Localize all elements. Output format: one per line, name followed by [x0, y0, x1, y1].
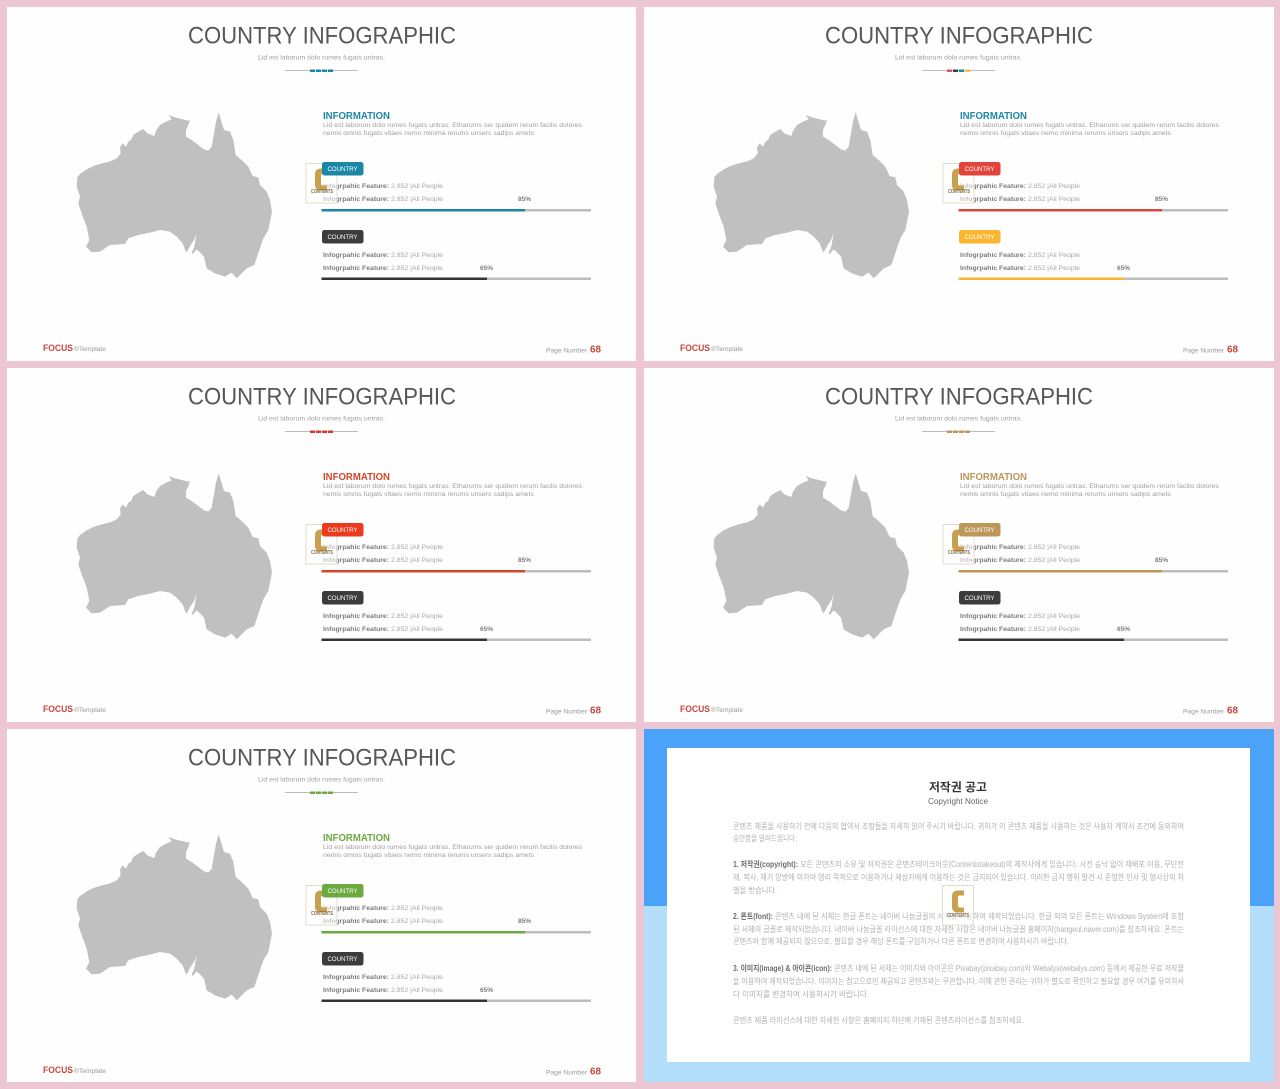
page number: 68 [590, 704, 601, 716]
country block 1: 2.852 |All People [391, 557, 443, 564]
notice section 3: image and icon: 3. 이미지(image) & 아이콘(icon): [733, 963, 832, 973]
heading: information: INFORMATION [323, 833, 390, 844]
badge: COUNTRY [964, 166, 995, 173]
country block 2: COUNTRY [328, 595, 358, 602]
country block 2: 2.852 |All People [391, 265, 443, 272]
footer brand: FOCUS [43, 1065, 73, 1076]
country block 2 [322, 230, 591, 280]
badge [959, 162, 1000, 176]
title divider [922, 430, 995, 433]
country block 1: Infogrpahic Feature: [960, 557, 1026, 564]
watermark logo [943, 524, 974, 564]
notice subtitle: Copyright Notice [928, 797, 989, 806]
country block 2: Infogrpahic Feature: [960, 265, 1026, 272]
country block 1: Infogrpahic Feature: [323, 183, 389, 190]
badge: COUNTRY [328, 166, 358, 173]
title divider [285, 430, 358, 433]
country block 2: Infogrpahic Feature: [323, 265, 389, 272]
watermark logo [943, 164, 974, 203]
watermark logo: CONTENTS [947, 913, 970, 919]
panel: copyright notice [644, 729, 1274, 1082]
page number [546, 704, 601, 716]
page number: 68 [1227, 704, 1238, 716]
country block 1: 2.852 |All People [1028, 557, 1080, 564]
page number: Page Number [546, 348, 588, 354]
country block 2 [322, 591, 591, 641]
page number: 68 [1227, 344, 1238, 356]
information text: Lid est laborum dolo rumes fugats untras. Etharums ser quidem rerum facilis dolores [323, 844, 583, 851]
notice section 2: font: 2. 폰트(font): [733, 912, 773, 921]
panel: slide 1 teal [7, 7, 636, 361]
watermark logo: CONTENTS [948, 189, 971, 195]
information text: Lid est laborum dolo rumes fugats untras. Etharums ser quidem rerum facilis dolores [323, 122, 583, 129]
notice section 1: copyright: 벌을 받습니다. [733, 885, 777, 895]
watermark logo [942, 886, 974, 925]
page number: 68 [590, 344, 601, 356]
page number: Page Number [1183, 708, 1225, 716]
notice section 3: image and icon [733, 963, 1184, 999]
footer brand: FOCUS [43, 343, 73, 354]
country block 1: 2.852 |All People [391, 544, 443, 551]
country block 1: Infogrpahic Feature: [323, 557, 389, 564]
notice section 1: copyright: 1. 저작권(copyright): [733, 859, 798, 869]
notice section 1: copyright: 모든 콘텐츠의 소유 및 저작권은 콘텐츠테이크아웃(Contentstakeout)의 제작사에게 있습니다. 사전 승낙 없이 재배포 이용, 무단전 [800, 859, 1184, 869]
country block 1: Infogrpahic Feature: [960, 544, 1026, 551]
information text [323, 122, 583, 137]
title: COUNTRY INFOGRAPHIC [825, 22, 1093, 50]
country block 2: 2.852 |All People [391, 974, 443, 981]
country block 2: Infogrpahic Feature: [960, 626, 1026, 633]
notice closing line: 콘텐츠 제품 라이선스에 대한 자세한 사항은 홈페이지 하단에 기재된 콘텐츠라이선스를 참조하세요. [733, 1015, 1024, 1025]
country block 2: Infogrpahic Feature: [323, 987, 389, 994]
country block 2: Infogrpahic Feature: [960, 252, 1026, 259]
page number [546, 344, 601, 356]
country block 1: Infogrpahic Feature: [323, 544, 389, 551]
information text: Lid est laborum dolo rumes fugats untras. Etharums ser quidem rerum facilis dolores [323, 483, 583, 490]
subtitle: Lid est laborum dolo rumes fugats untras. [258, 54, 385, 62]
heading: information: INFORMATION [960, 472, 1027, 483]
country block 2: 2.852 |All People [1028, 252, 1080, 259]
notice section 1: copyright [733, 859, 1184, 895]
notice section 2: font: 콘텐츠와 함께 제공되지 않으므로, 필요할 경우 해당 폰트를 구입하거나 다른 폰트로 변경하여 사용하시기 바랍니다. [733, 936, 1069, 946]
country block 1: 85% [518, 919, 532, 925]
country block 2: 65% [1117, 266, 1131, 272]
panel: slide 2 red and yellow [644, 7, 1274, 361]
title divider [285, 70, 358, 72]
country block 2: Infogrpahic Feature: [323, 252, 389, 259]
country block 1 [943, 162, 1228, 212]
notice section 2: font: 콘텐츠 내에 된 서체는 한글 폰트는 네이버 나눔글꼴의 서체를 이용하여 제작되었습니다. 한글 외의 모든 폰트는 Windows System에 포함 [775, 911, 1185, 921]
country block 1: 2.852 |All People [391, 905, 443, 912]
information text [960, 122, 1220, 137]
title divider [285, 792, 358, 794]
watermark logo: CONTENTS [948, 550, 971, 556]
country block 2: COUNTRY [328, 234, 358, 241]
panel: slide 4 tan [644, 368, 1274, 722]
country block 2 [322, 952, 591, 1002]
title: COUNTRY INFOGRAPHIC [188, 744, 456, 772]
country block 1 [943, 523, 1228, 572]
page number: Page Number [546, 1070, 588, 1076]
subtitle: Lid est laborum dolo rumes fugats untras. [895, 54, 1022, 62]
footer brand: ®Template [711, 706, 743, 714]
badge [322, 162, 364, 176]
title: COUNTRY INFOGRAPHIC [825, 384, 1093, 410]
badge: COUNTRY [328, 527, 358, 534]
information text: nemis omnis fugats vitaes nemo minima rerums unsers sadips amets [323, 852, 535, 859]
country block 1: 85% [1155, 558, 1169, 564]
country block 1: Infogrpahic Feature: [960, 196, 1026, 203]
country block 2: COUNTRY [964, 234, 995, 241]
page number [1183, 344, 1238, 356]
subtitle: Lid est laborum dolo rumes fugats untras. [895, 416, 1022, 422]
country block 2: 2.852 |All People [391, 987, 443, 994]
map: Australia [76, 834, 272, 1000]
country block 1: 2.852 |All People [1028, 196, 1080, 203]
country block 2: 2.852 |All People [391, 613, 443, 620]
country block 1 [306, 162, 591, 212]
notice intro [733, 821, 1184, 843]
notice intro: 승인함을 알려드립니다. [733, 833, 797, 843]
country block 1: 2.852 |All People [391, 918, 443, 925]
country block 1: Infogrpahic Feature: [323, 196, 389, 203]
notice title: 저작권 공고 [929, 780, 987, 794]
country block 1: Infogrpahic Feature: [323, 905, 389, 912]
country block 1: Infogrpahic Feature: [323, 918, 389, 925]
watermark logo [306, 164, 337, 203]
country block 2: 2.852 |All People [1028, 626, 1080, 633]
information text: Lid est laborum dolo rumes fugats untras. Etharums ser quidem rerum facilis dolores [960, 122, 1220, 129]
notice section 1: copyright: 재, 복사, 재기 양방에 의하여 영리 목적으로 이용하거나 제삼자에게 이용하는 것은 금지되어 있습니다. 이러한 금지 행위 발견 시 준엄한 민사 및 형사상의 처 [733, 872, 1184, 882]
country block 2: 65% [1117, 627, 1131, 633]
page number: Page Number [546, 708, 588, 716]
map: Australia [76, 112, 272, 278]
footer brand [680, 704, 743, 715]
heading: information: INFORMATION [323, 472, 390, 483]
country block 1: 85% [518, 197, 532, 203]
information text: nemis omnis fugats vitaes nemo minima rerums unsers sadips amets [323, 491, 535, 498]
country block 1: 2.852 |All People [391, 183, 443, 190]
country block 2: Infogrpahic Feature: [323, 974, 389, 981]
country block 1 [306, 523, 591, 572]
footer brand: FOCUS [43, 704, 73, 715]
page number [1183, 704, 1238, 716]
country block 2: COUNTRY [964, 595, 995, 602]
subtitle: Lid est laborum dolo rumes fugats untras. [258, 776, 385, 784]
country block 2: Infogrpahic Feature: [960, 613, 1026, 620]
country block 1: 85% [518, 558, 532, 564]
badge: COUNTRY [328, 888, 358, 895]
country block 2: 65% [480, 266, 494, 272]
notice section 3: image and icon: 콘텐츠 내에 된 서체는 이미지와 아이콘은 Pixabay(pixabay.com)와 Webalys(webalys.com) 등에서 제공한 무료 저작물 [834, 963, 1184, 973]
country block 1: 2.852 |All People [1028, 183, 1080, 190]
country block 1: 2.852 |All People [1028, 544, 1080, 551]
footer brand: FOCUS [680, 704, 710, 715]
country block 2: COUNTRY [328, 956, 358, 963]
information text: nemis omnis fugats vitaes nemo minima rerums unsers sadips amets [960, 130, 1172, 137]
country block 2: 2.852 |All People [391, 252, 443, 259]
footer brand: FOCUS [680, 343, 710, 354]
country block 2: 65% [480, 988, 494, 994]
watermark logo [306, 524, 337, 564]
footer brand: ®Template [711, 345, 743, 353]
heading: information: INFORMATION [323, 111, 390, 122]
country block 1: Infogrpahic Feature: [960, 183, 1026, 190]
panel: slide 3 orange-red [7, 368, 636, 722]
notice section 2: font: 된 서체의 글꼴로 제작되었습니다. 네이버 나눔글꼴 라이선스에 대한 자세한 사항은 네이버 나눔글꼴 홈페이지(hangeul.naver.com)를 참조하세요. 폰트는 [733, 924, 1184, 934]
country block 1 [306, 884, 591, 934]
footer brand: ®Template [74, 706, 106, 714]
country block 2 [958, 591, 1228, 641]
badge [959, 523, 1000, 536]
country block 2: Infogrpahic Feature: [323, 613, 389, 620]
footer brand [43, 343, 106, 354]
watermark logo [306, 886, 337, 925]
badge: COUNTRY [964, 527, 995, 534]
watermark logo: CONTENTS [311, 911, 334, 917]
map: Australia [714, 112, 909, 278]
country block 1: 85% [1155, 197, 1169, 203]
subtitle: Lid est laborum dolo rumes fugats untras. [258, 416, 385, 422]
notice intro: 콘텐츠 제품을 사용하기 전에 다음의 협약서 조항들을 자세히 읽어 주시기 바랍니다. 귀하가 이 콘텐츠 제품을 사용하는 것은 사용자 계약서 조건에 동의하여 [733, 821, 1184, 831]
watermark logo: CONTENTS [311, 550, 334, 556]
map: Australia [714, 474, 909, 640]
notice section 3: image and icon: 을 이용하여 제작되었습니다. 이미지는 참고으로만 제공되고 콘텐츠와는 무관합니다. 이에 관한 권리는 귀하가 별도로 확인하고 필요할 경우 여기를 유의하셔 [733, 976, 1184, 986]
panel: slide 5 green [7, 729, 636, 1082]
information text: nemis omnis fugats vitaes nemo minima rerums unsers sadips amets [960, 491, 1172, 498]
footer brand [43, 704, 106, 715]
information text [323, 483, 583, 498]
page number: 68 [590, 1066, 601, 1078]
footer brand [680, 343, 743, 354]
information text: nemis omnis fugats vitaes nemo minima rerums unsers sadips amets [323, 130, 535, 137]
country block 1: 2.852 |All People [391, 196, 443, 203]
page number: Page Number [1183, 348, 1225, 354]
notice section 3: image and icon: 다 이미지를 변경하여 사용하시기 바랍니다. [733, 989, 869, 999]
information text [323, 844, 583, 859]
badge [322, 523, 364, 536]
page number [546, 1066, 601, 1078]
information text: Lid est laborum dolo rumes fugats untras. Etharums ser quidem rerum facilis dolores [960, 483, 1220, 490]
title divider [922, 70, 995, 72]
title: COUNTRY INFOGRAPHIC [188, 22, 456, 50]
heading: information: INFORMATION [960, 111, 1027, 122]
footer brand: ®Template [74, 1067, 106, 1075]
watermark logo: CONTENTS [311, 189, 334, 195]
badge [322, 884, 364, 898]
footer brand: ®Template [74, 345, 106, 353]
country block 2: 65% [480, 627, 494, 633]
notice section 2: font [733, 911, 1185, 946]
country block 2: 2.852 |All People [1028, 613, 1080, 620]
country block 2: Infogrpahic Feature: [323, 626, 389, 633]
country block 2: 2.852 |All People [1028, 265, 1080, 272]
title: COUNTRY INFOGRAPHIC [188, 384, 456, 410]
country block 2 [958, 230, 1228, 280]
information text [960, 483, 1220, 498]
map: Australia [76, 474, 272, 640]
country block 2: 2.852 |All People [391, 626, 443, 633]
footer brand [43, 1065, 106, 1076]
